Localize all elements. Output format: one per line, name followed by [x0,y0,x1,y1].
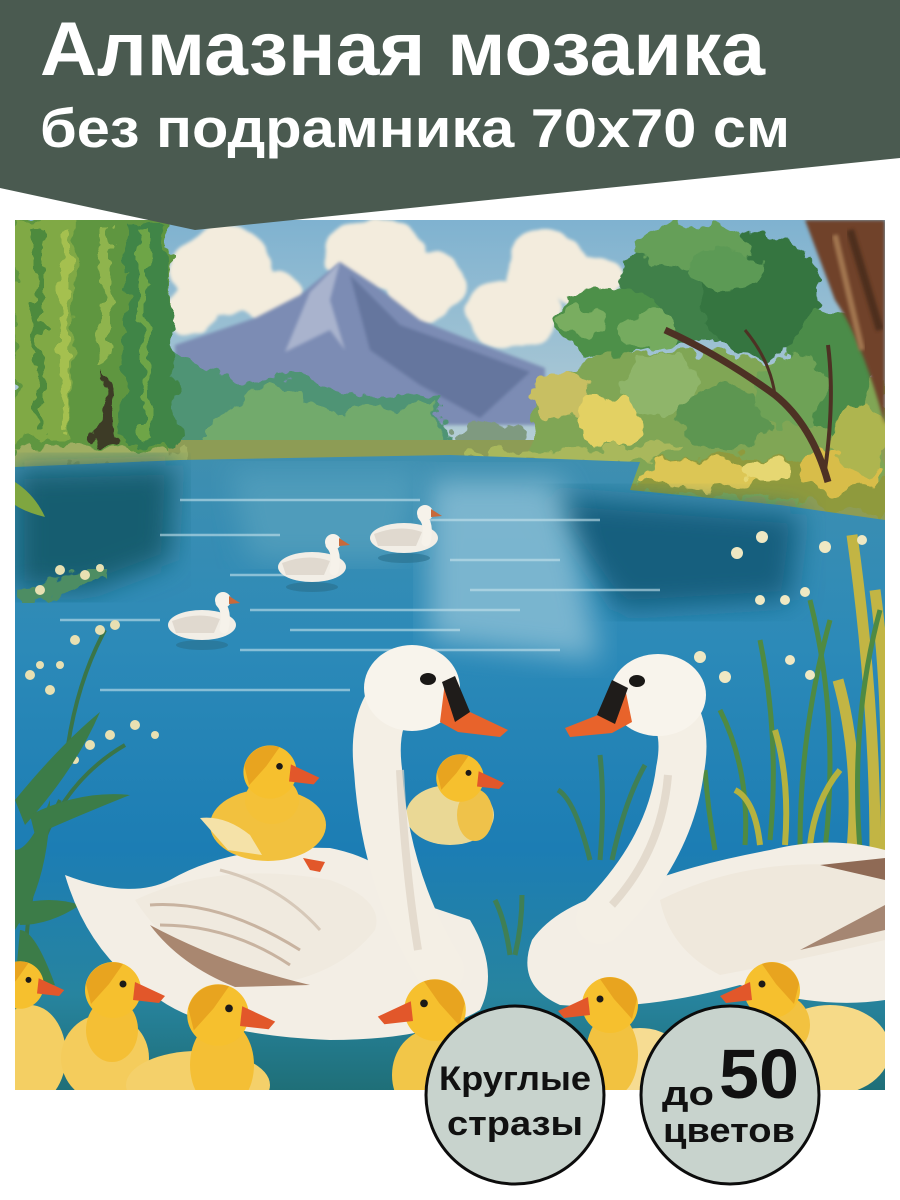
subtitle: без подрамника 70х70 см [40,97,790,159]
tree canopy [558,223,886,476]
badge: round rhinestones: Круглые [439,1060,591,1098]
distant hills [170,352,527,440]
left swan [65,645,508,1040]
right bank foliage [470,350,885,515]
foreground ducklings [15,961,885,1090]
duckling behind swan [406,754,504,845]
willow tree left [10,215,190,468]
tree trunk and branches [665,220,885,482]
badge: up to 50 colours [641,1006,819,1184]
clouds [165,220,621,350]
badge: up to 50 colours: цветов [663,1112,795,1150]
left flowering plants [15,482,159,985]
sky [15,220,885,460]
title: Алмазная мозаика [40,7,766,92]
small swans [168,505,442,650]
badge: up to 50 colours: до [662,1075,714,1113]
badge: round rhinestones [426,1006,604,1184]
header banner [0,0,900,230]
duckling on swan back [200,745,326,872]
mountain [175,262,545,425]
lake water [15,455,885,1090]
badge: up to 50 colours: 50 [719,1035,799,1113]
painting: swans on a lake [0,215,890,1120]
right reeds and flowers [495,531,886,955]
water reflections [15,465,800,690]
badge: round rhinestones: стразы [447,1105,583,1143]
right swan [527,654,885,1006]
far shoreline strip [15,440,885,525]
